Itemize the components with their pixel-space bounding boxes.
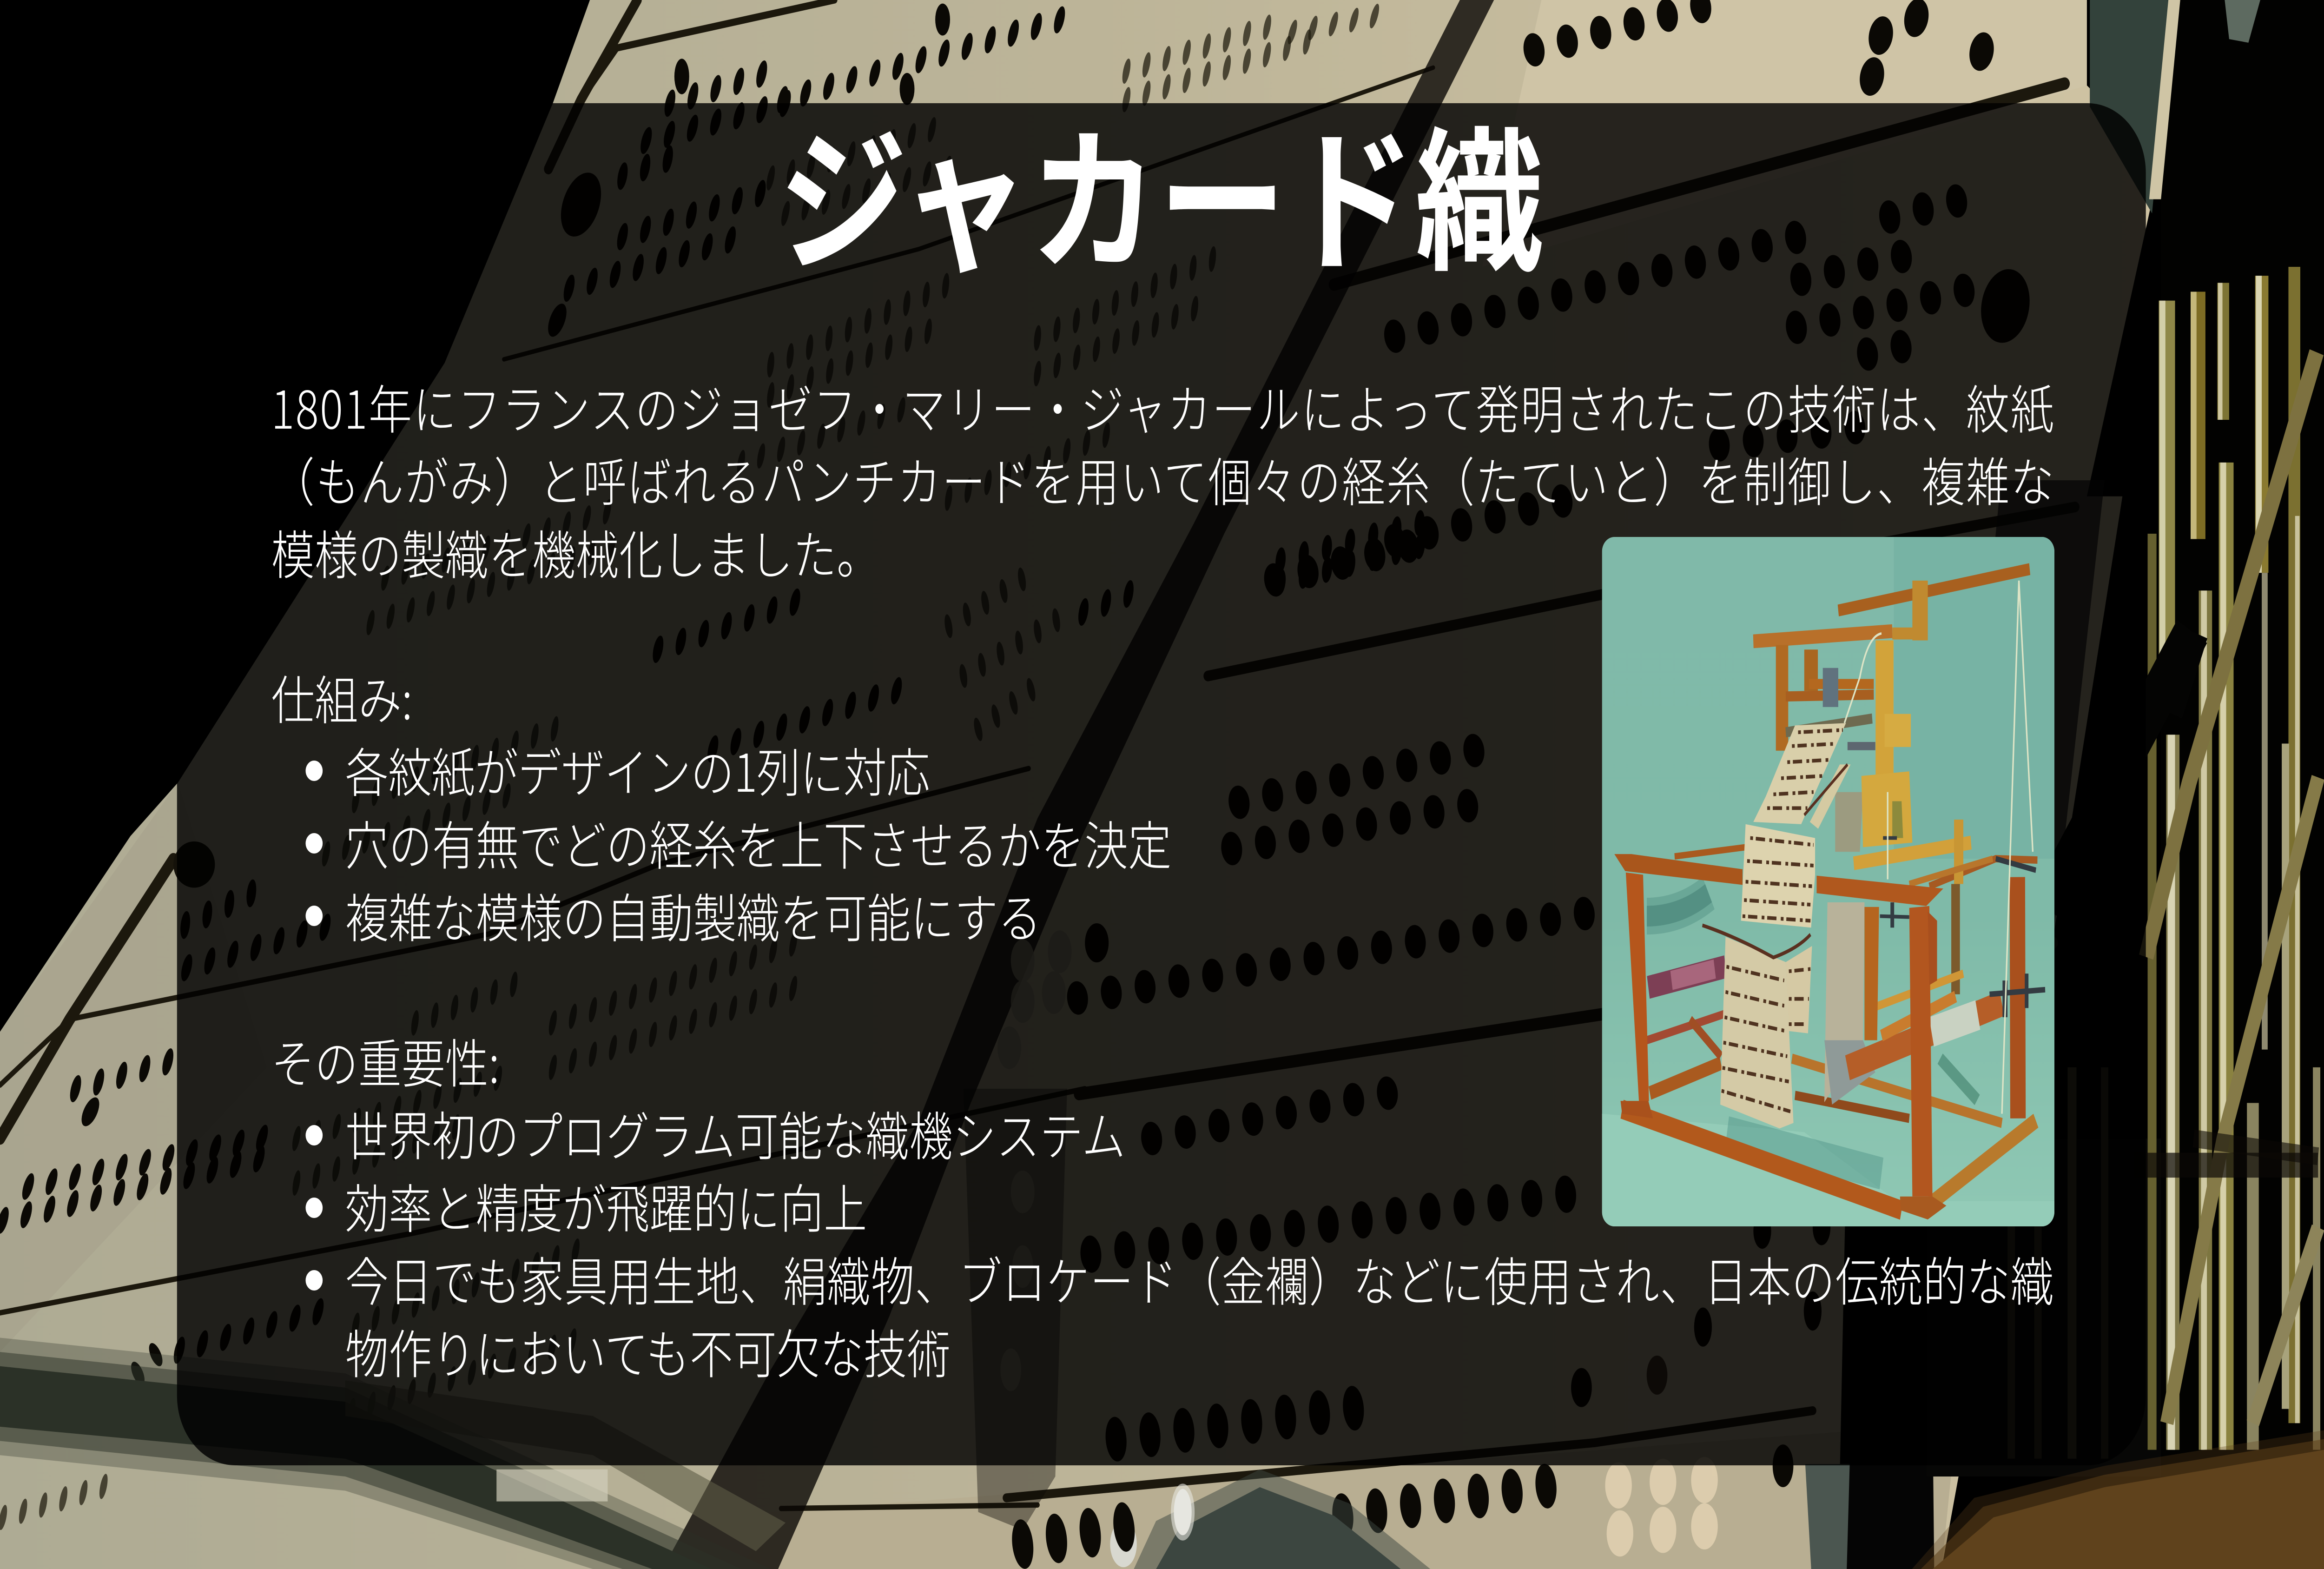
importance bullets: 効率と精度が飛躍的に向上: [345, 1167, 867, 1243]
intro paragraph: （もんがみ）と呼ばれるパンチカードを用いて個々の経糸（たていと）を制御し、複雑な: [271, 441, 2054, 516]
punch card chain: [1703, 723, 1851, 1128]
importance bullets: 物作りにおいても不可欠な技術: [345, 1313, 951, 1389]
how it works bullets: 複雑な模様の自動製織を可能にする: [345, 877, 1042, 953]
loom rear frame and bottom rails: [1622, 847, 2037, 1210]
how it works bullets: [306, 731, 1171, 953]
title: ジャカード織: [779, 79, 1544, 302]
clamps and hardware: [1880, 838, 2045, 1017]
pull cords: [1844, 581, 2033, 1114]
intro paragraph: 1801年にフランスのジョゼフ・マリー・ジャカールによって発明されたこの技術は、紋紙: [271, 368, 2054, 444]
backdrop: [1602, 537, 2054, 1226]
body text block: [271, 368, 2054, 1389]
front frame of loom: [1614, 854, 1946, 1219]
intro paragraph: 模様の製織を機械化しました。: [271, 514, 880, 589]
heading: how it works: 仕組み:: [271, 659, 412, 735]
importance bullets: [306, 1095, 2054, 1389]
middle post: [1864, 907, 1879, 1040]
how it works bullets: 各紋紙がデザインの1列に対応: [345, 731, 930, 807]
importance bullets: 今日でも家具用生地、絹織物、ブロケード（金襴）などに使用され、日本の伝統的な織: [345, 1240, 2054, 1316]
heading: importance: その重要性:: [271, 1022, 500, 1098]
reeds and warp strands on the right: [1927, 0, 2324, 1476]
intro paragraph: [271, 368, 2054, 589]
photo: jacquard loom with chained punch cards: [1602, 537, 2054, 1226]
upper jacquard head: [1753, 569, 2030, 884]
rollers and warp threads: [1647, 792, 2002, 1105]
how it works bullets: 穴の有無でどの経糸を上下させるかを決定: [345, 804, 1171, 880]
importance bullets: 世界初のプログラム可能な織機システム: [345, 1095, 1125, 1171]
soft foreground: rods, table and clamp: [0, 1338, 2324, 1569]
translucent dark text panel: [177, 103, 2146, 1465]
